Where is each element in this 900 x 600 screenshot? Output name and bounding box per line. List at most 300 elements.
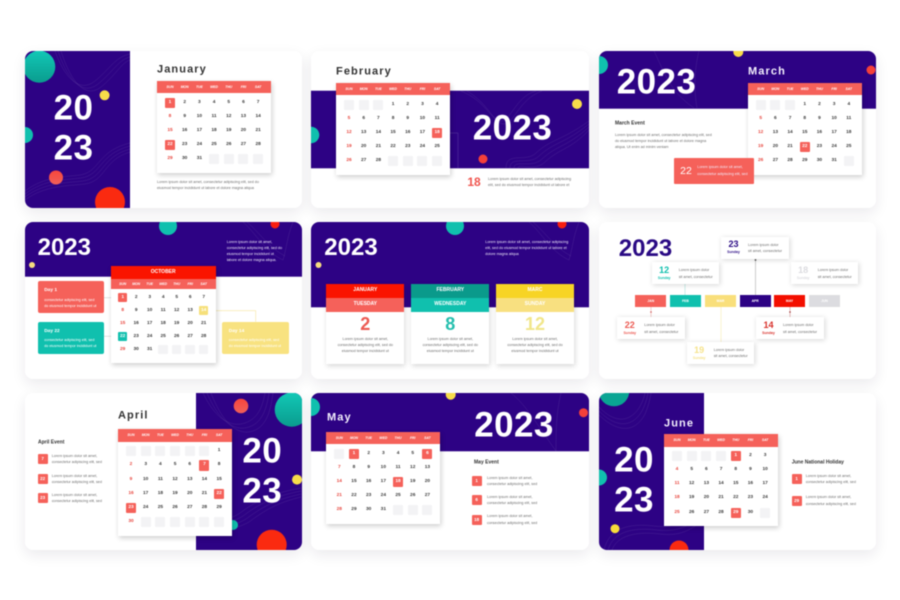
calendar: June: 24 — [762, 495, 768, 500]
event card: 23: sit amet, consectetur — [748, 249, 782, 253]
event heading: June National Holiday — [792, 460, 844, 466]
header text: elit, sed do eiusmod tempor incididunt ut labore et — [485, 246, 567, 250]
calendar: June: 10 — [762, 467, 768, 472]
year: 2023 — [324, 234, 378, 261]
event card: 22 — [617, 317, 685, 339]
calendar: January: WED — [210, 85, 218, 89]
calendar: March: 26 — [758, 158, 763, 163]
calendar: May: 4 — [397, 451, 399, 456]
calendar: April: 7 — [203, 462, 206, 467]
calendar: October: SAT — [200, 282, 207, 286]
calendar: February: 14 — [376, 130, 381, 135]
callout: Day 14: Day 14 — [229, 329, 244, 334]
calendar: May: 15 — [351, 479, 357, 484]
calendar: June: 13 — [704, 481, 709, 486]
panel: timeline slide — [599, 222, 876, 379]
panel: October slide — [25, 222, 302, 379]
calendar: May: THU — [395, 436, 402, 440]
year split 20: 20 — [242, 431, 282, 470]
callout number: 22 — [680, 165, 692, 177]
calendar: March: 28 — [787, 158, 793, 163]
calendar: February: 13 — [361, 130, 366, 135]
calendar: February: FRI — [420, 87, 425, 91]
event 1: 1 — [475, 478, 478, 483]
event card: 12: Sunday — [658, 276, 671, 280]
event 22: 22 — [40, 476, 45, 481]
calendar: June: FRI — [748, 438, 753, 442]
calendar: January: 11 — [212, 114, 217, 119]
calendar: October: WED — [159, 282, 167, 286]
callout: Day 1: do eiusmod tempor incididunt ut — [44, 304, 96, 308]
calendar: February: 26 — [346, 158, 352, 163]
event 29: consectetur adipiscing elit, sed — [806, 502, 856, 506]
calendar: February: SUN — [345, 87, 353, 91]
column: January: 2 — [360, 314, 370, 334]
event card: 23: Lorem ipsum dolor — [748, 243, 779, 247]
callout: Day 1: Day 1 — [44, 288, 57, 293]
calendar: April: 27 — [187, 505, 192, 510]
event card: 18: 18 — [798, 265, 808, 275]
calendar: April: 26 — [172, 505, 178, 510]
calendar: January: TUE — [196, 85, 203, 89]
calendar: June: 14 — [718, 481, 724, 486]
calendar: April: TUE — [157, 433, 164, 437]
calendar: January: 5 — [227, 100, 230, 105]
event date: 18 — [467, 175, 481, 189]
event card: 14: 14 — [763, 320, 774, 330]
calendar: May: 3 — [382, 451, 385, 456]
calendar: May: 28 — [337, 507, 342, 512]
calendar: April: FRI — [202, 433, 207, 437]
calendar: January: 14 — [255, 114, 261, 119]
calendar: January: 16 — [182, 128, 187, 133]
calendar: April: 18 — [158, 491, 163, 496]
event card: 22: Sunday — [623, 331, 636, 335]
calendar: April: 1 — [218, 448, 220, 453]
calendar: October: 14 — [201, 308, 206, 313]
calendar: May: 30 — [366, 507, 371, 512]
event 23 — [37, 492, 102, 504]
month strip: FEB — [682, 299, 689, 303]
column: February: eiusmod tempor incididunt ut — [427, 349, 474, 353]
calendar: October: 13 — [188, 308, 193, 313]
calendar: April: 10 — [143, 477, 148, 482]
event 1: consectetur adipiscing elit, sed — [806, 480, 856, 484]
calendar: October: 17 — [147, 321, 152, 326]
month banner — [111, 266, 216, 279]
calendar: January: 25 — [211, 142, 217, 147]
column: March: eiusmod tempor incididunt ut — [511, 349, 559, 353]
calendar: February: 22 — [390, 144, 396, 149]
event text — [488, 177, 572, 188]
caption — [156, 180, 260, 190]
calendar: March: WED — [801, 87, 809, 91]
column: January — [326, 284, 404, 364]
calendar: February: 1 — [392, 102, 394, 107]
event 7 — [37, 453, 102, 465]
calendar: June: SUN — [673, 438, 681, 442]
calendar: October: 28 — [201, 334, 206, 339]
callout: Day 1 — [38, 281, 104, 313]
calendar: April: 9 — [130, 477, 132, 482]
calendar: January: 17 — [197, 128, 202, 133]
event heading: May Event — [474, 460, 499, 466]
event 6: 6 — [475, 497, 478, 502]
month heading: June — [664, 417, 694, 429]
event card: 19: Sunday — [693, 356, 706, 360]
calendar: March: 6 — [774, 116, 777, 121]
calendar: June: 30 — [748, 510, 753, 515]
calendar: February: 16 — [405, 130, 410, 135]
calendar: May: 11 — [395, 465, 401, 470]
calendar: June: 21 — [718, 495, 724, 500]
calendar: January: 3 — [198, 100, 201, 105]
calendar: October: 15 — [120, 321, 125, 326]
calendar: April: 23 — [128, 505, 134, 510]
calendar: March: 24 — [831, 144, 837, 149]
column: February: WEDNESDAY — [434, 301, 466, 307]
column: March: 12 — [525, 314, 545, 334]
calendar: April: 17 — [143, 491, 148, 496]
column: February — [411, 284, 489, 364]
calendar: April: 14 — [202, 477, 207, 482]
calendar: May: 6 — [426, 451, 429, 456]
calendar: January: SAT — [255, 85, 261, 89]
calendar: May: 20 — [425, 479, 430, 484]
column: March: Lorem ipsum dolor sit amet, — [512, 337, 558, 341]
month heading: February — [336, 66, 392, 78]
calendar: April: SAT — [216, 433, 222, 437]
calendar: April: 11 — [158, 477, 163, 482]
purple header with circles — [310, 392, 590, 452]
event card: 18 — [791, 262, 858, 284]
calendar: May: TUE — [365, 436, 372, 440]
calendar: May: SUN — [336, 436, 343, 440]
event card: 22: sit amet, consectetur — [644, 330, 678, 334]
header text — [226, 240, 283, 263]
callout: Day 22 — [38, 322, 104, 354]
calendar: October: TUE — [146, 282, 153, 286]
calendar: March: TUE — [787, 87, 793, 91]
calendar: June: MON — [688, 438, 696, 442]
event card: 19 — [687, 342, 754, 364]
year: 2023 — [38, 234, 91, 261]
calendar: October: 16 — [134, 321, 139, 326]
calendar: March: SUN — [757, 87, 764, 91]
calendar: March: 1 — [803, 102, 806, 107]
column: January: consectetur adipiscing elit, sed do — [338, 343, 393, 347]
calendar: February: SAT — [434, 87, 440, 91]
calendar: March: 9 — [818, 116, 821, 121]
calendar: March: MON — [771, 87, 779, 91]
calendar: October: 18 — [161, 321, 166, 326]
column: February: consectetur adipiscing elit, sed do — [423, 343, 478, 347]
calendar: May: 13 — [425, 465, 430, 470]
calendar: March: 8 — [803, 116, 806, 121]
month heading: March — [748, 65, 786, 77]
year: 2023 — [474, 405, 554, 444]
calendar: June: 16 — [748, 481, 753, 486]
calendar: January: 27 — [241, 142, 246, 147]
column: March: MARC — [528, 287, 542, 293]
calendar: October — [111, 266, 216, 363]
event card: 18: sit amet, consectetur — [818, 275, 852, 279]
calendar: February: 10 — [420, 116, 425, 121]
calendar: October: 31 — [147, 347, 152, 352]
calendar: March: 2 — [818, 102, 821, 107]
event card: 14 — [756, 317, 824, 339]
panel: April slide — [25, 393, 302, 550]
calendar: January: 15 — [167, 128, 173, 133]
calendar: June: 5 — [690, 467, 693, 472]
calendar: April: 4 — [159, 462, 162, 467]
column: January: Lorem ipsum dolor sit amet, — [343, 337, 388, 341]
event 6: consectetur adipiscing elit, sed — [487, 501, 537, 505]
calendar: February: THU — [404, 87, 411, 91]
month strip — [634, 294, 840, 308]
calendar: January: 2 — [183, 100, 186, 105]
column: February: FEBRUARY — [436, 287, 464, 293]
calendar: April: 13 — [187, 477, 192, 482]
calendar: May: 2 — [367, 451, 370, 456]
calendar: March: 15 — [802, 130, 807, 135]
calendar: May: 22 — [351, 493, 357, 498]
calendar: January: 4 — [213, 100, 215, 105]
header text: Lorem ipsum dolor sit amet, consectetur adipiscing — [485, 240, 568, 244]
event 7: 7 — [41, 456, 44, 461]
calendar: February: 21 — [376, 144, 381, 149]
calendar: June: 3 — [764, 453, 766, 458]
calendar: March: THU — [816, 87, 823, 91]
event card: 19: Lorem ipsum dolor — [714, 348, 744, 352]
calendar: April: 25 — [158, 505, 163, 510]
calendar: October: 26 — [174, 334, 179, 339]
callout text — [696, 165, 748, 176]
purple side panel with circles and waves — [195, 392, 303, 551]
calendar: October: 23 — [134, 334, 139, 339]
month strip: APR — [752, 299, 759, 303]
calendar: May: WED — [379, 436, 387, 440]
calendar: April: 22 — [216, 491, 222, 496]
calendar: October: FRI — [187, 282, 193, 286]
year: 2023 — [617, 62, 696, 102]
calendar: June: 20 — [704, 495, 709, 500]
event card: 14: Sunday — [762, 331, 775, 335]
calendar: April: SUN — [127, 433, 135, 437]
calendar: May: 16 — [366, 479, 371, 484]
calendar: February: 25 — [434, 144, 440, 149]
calendar: February: 4 — [436, 102, 438, 107]
calendar: April: 20 — [187, 491, 192, 496]
event 22: consectetur adipiscing elit, sed — [52, 480, 102, 484]
calendar: March: 29 — [802, 158, 807, 163]
calendar: May: 7 — [338, 465, 341, 470]
event 7: consectetur adipiscing elit, sed — [52, 460, 102, 464]
column: March: consectetur adipiscing elit, sed do — [507, 343, 563, 347]
calendar: February: 15 — [390, 130, 396, 135]
purple header and circles — [310, 221, 590, 308]
calendar: April: 2 — [130, 462, 132, 467]
calendar: June: 2 — [749, 453, 752, 458]
calendar: May: SAT — [424, 436, 431, 440]
calendar: May: 19 — [410, 479, 415, 484]
purple side panel with circles and waves — [598, 392, 705, 551]
event card: 18: Sunday — [797, 276, 810, 280]
event 1: Lorem ipsum dolor sit amet, — [487, 476, 532, 480]
calendar: February: 2 — [406, 102, 409, 107]
event 1: 1 — [795, 476, 798, 481]
column: February: Lorem ipsum dolor sit amet, — [428, 337, 473, 341]
calendar: May: 23 — [366, 493, 371, 498]
calendar: March: 16 — [817, 130, 822, 135]
year split 20: 20 — [54, 88, 93, 128]
calendar: March: 7 — [789, 116, 791, 121]
event text: elit, sed do eiusmod tempor incididunt ut labore et — [488, 183, 569, 187]
event 22: Lorem ipsum dolor sit amet, — [52, 474, 97, 478]
calendar: March: 10 — [831, 116, 837, 121]
calendar: February: 7 — [377, 116, 380, 121]
calendar: October: MON — [132, 282, 140, 286]
calendar: May: 26 — [410, 493, 415, 498]
year split 23: 23 — [614, 480, 654, 520]
calendar: October: 29 — [120, 347, 125, 352]
calendar: October: SUN — [119, 282, 126, 286]
calendar: February: 8 — [392, 116, 394, 121]
calendar: May: 18 — [395, 479, 401, 484]
calendar: October: 21 — [201, 321, 206, 326]
event card: 23: 23 — [728, 239, 738, 249]
event 29: Lorem ipsum dolor sit amet, — [806, 495, 851, 499]
calendar: June: 22 — [733, 495, 738, 500]
event text: do eiusmod tempor incididunt ut labore et dolore magna — [615, 139, 706, 143]
calendar: January: 31 — [197, 156, 202, 161]
event 1 — [471, 475, 538, 487]
caption: Lorem ipsum dolor sit amet, consectetur adipiscing elit, sed do — [157, 180, 259, 184]
month heading: April — [118, 410, 149, 422]
calendar: February: 19 — [346, 144, 352, 149]
calendar: March: 5 — [759, 116, 762, 121]
calendar: June: 18 — [674, 495, 680, 500]
calendar: March: 21 — [787, 144, 793, 149]
callout: Day 14 — [222, 322, 289, 354]
calendar: January: 7 — [257, 100, 259, 105]
calendar: March: 4 — [847, 102, 850, 107]
calendar: January: 22 — [167, 142, 173, 147]
calendar: June: 23 — [748, 495, 753, 500]
calendar: October: 19 — [174, 321, 179, 326]
calendar: May: FRI — [410, 436, 415, 440]
calendar: June: 27 — [704, 510, 709, 515]
calendar: October: 1 — [121, 295, 124, 300]
calendar: April: MON — [142, 433, 150, 437]
calendar: June: 15 — [733, 481, 738, 486]
month heading: January — [157, 64, 207, 76]
event card: 23: Sunday — [727, 250, 740, 254]
callout: Day 14: do eiusmod tempor incididunt ut — [229, 344, 281, 348]
calendar: June: 9 — [749, 467, 752, 472]
calendar: June: 1 — [734, 453, 737, 458]
calendar: March: 19 — [758, 144, 763, 149]
calendar: March: 13 — [773, 130, 778, 135]
calendar: April: 3 — [144, 462, 147, 467]
calendar: June: 29 — [733, 510, 738, 515]
calendar: May: 9 — [367, 465, 370, 470]
calendar: May: 1 — [353, 451, 355, 456]
month heading: May — [327, 412, 352, 424]
calendar: June: THU — [732, 438, 739, 442]
calendar: May — [326, 432, 440, 524]
event text: Lorem ipsum dolor sit amet, consectetur adipiscing elit, sed — [615, 133, 712, 137]
purple band with circles, waves and connector — [310, 90, 590, 170]
year split 20: 20 — [614, 440, 654, 480]
event 29 — [791, 495, 856, 507]
callout text: consectetur adipiscing elit, sed — [697, 172, 748, 176]
calendar: October: THU — [173, 282, 180, 286]
year split 23: 23 — [242, 471, 282, 510]
calendar: April: 6 — [188, 462, 191, 467]
panel: January slide — [25, 51, 302, 208]
event card: 19: 19 — [694, 344, 704, 354]
calendar: January: SUN — [166, 85, 174, 89]
calendar: May: 31 — [381, 507, 386, 512]
event text: Lorem ipsum dolor sit amet, consectetur adipiscing — [488, 177, 571, 181]
month banner: OCTOBER — [151, 269, 176, 275]
event heading: March Event — [615, 121, 645, 127]
calendar: January: 19 — [226, 128, 231, 133]
column: March: SUNDAY — [525, 301, 545, 307]
calendar: May: 24 — [381, 493, 386, 498]
calendar: October: 5 — [175, 295, 178, 300]
event 22 — [37, 473, 102, 485]
calendar: March: 18 — [846, 130, 851, 135]
callout: Day 22: do eiusmod tempor incididunt ut — [44, 344, 96, 348]
calendar: May: 25 — [395, 493, 401, 498]
calendar: October: 27 — [188, 334, 193, 339]
calendar: January: FRI — [241, 85, 246, 89]
calendar: October: 9 — [135, 308, 138, 313]
calendar: April: 28 — [202, 505, 207, 510]
calendar: January: 26 — [226, 142, 231, 147]
calendar: February — [336, 83, 450, 175]
calendar: January: 18 — [211, 128, 217, 133]
calendar: October: 3 — [148, 295, 151, 300]
calendar: February: 6 — [362, 116, 365, 121]
calendar: October: 11 — [161, 308, 166, 313]
event 18 — [471, 514, 538, 526]
year: 2023 — [619, 235, 672, 262]
calendar: October: 7 — [202, 295, 205, 300]
event card: 22: 22 — [625, 320, 635, 330]
calendar: May: 12 — [410, 465, 415, 470]
callout: Day 14: consectetur adipiscing elit, sed — [229, 338, 279, 342]
calendar: October: 30 — [134, 347, 139, 352]
calendar: October: 20 — [188, 321, 193, 326]
calendar: March: 11 — [846, 116, 851, 121]
event 1 — [791, 473, 856, 485]
calendar: April: 12 — [172, 477, 178, 482]
calendar: April: 19 — [172, 491, 178, 496]
event 18: Lorem ipsum dolor sit amet, — [487, 514, 532, 518]
event card: 12 — [652, 262, 719, 284]
calendar: March: 20 — [773, 144, 778, 149]
calendar: June: 8 — [734, 467, 737, 472]
calendar: April: WED — [171, 433, 179, 437]
calendar: June: 25 — [674, 510, 680, 515]
panel: three month highlights slide — [311, 222, 589, 379]
calendar: January: MON — [181, 85, 189, 89]
year split 23: 23 — [54, 128, 93, 168]
calendar: May: 5 — [411, 451, 414, 456]
